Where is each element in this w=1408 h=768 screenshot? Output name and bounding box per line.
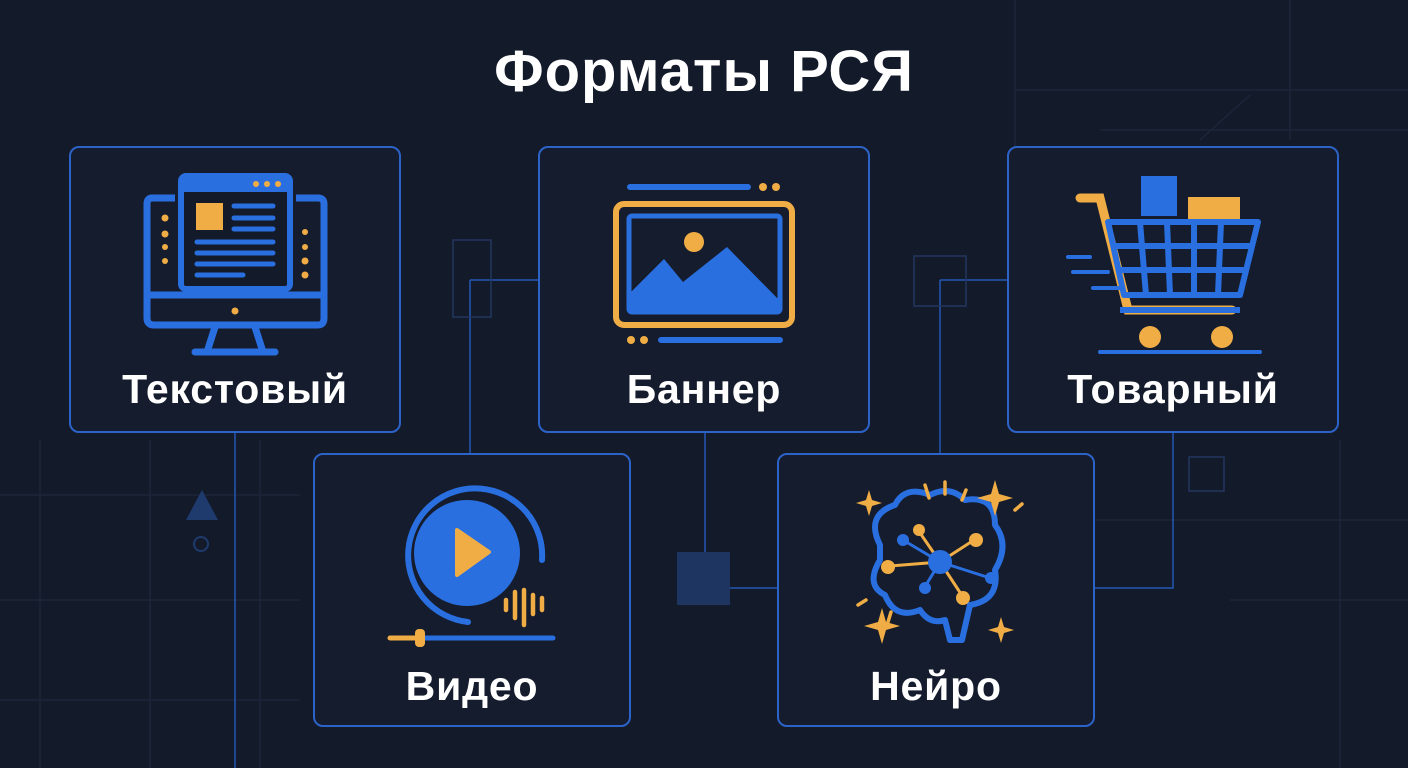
panel: Нейро xyxy=(777,453,1095,727)
label: Нейро xyxy=(870,663,1002,709)
title: Форматы РСЯ xyxy=(494,39,914,104)
icon: cart xyxy=(1066,176,1262,354)
label: Товарный xyxy=(1067,366,1279,412)
panel: Товарный xyxy=(1007,146,1339,433)
panel: Видео xyxy=(313,453,631,727)
panel: Текстовый xyxy=(69,146,401,433)
icon: banner image xyxy=(613,183,795,344)
panel: Баннер xyxy=(538,146,870,433)
icon: monitor xyxy=(144,173,328,356)
icon: video play xyxy=(388,485,556,647)
label: Видео xyxy=(406,663,538,709)
icon: brain xyxy=(856,480,1024,644)
label: Баннер xyxy=(627,366,781,412)
label: Текстовый xyxy=(122,366,348,412)
